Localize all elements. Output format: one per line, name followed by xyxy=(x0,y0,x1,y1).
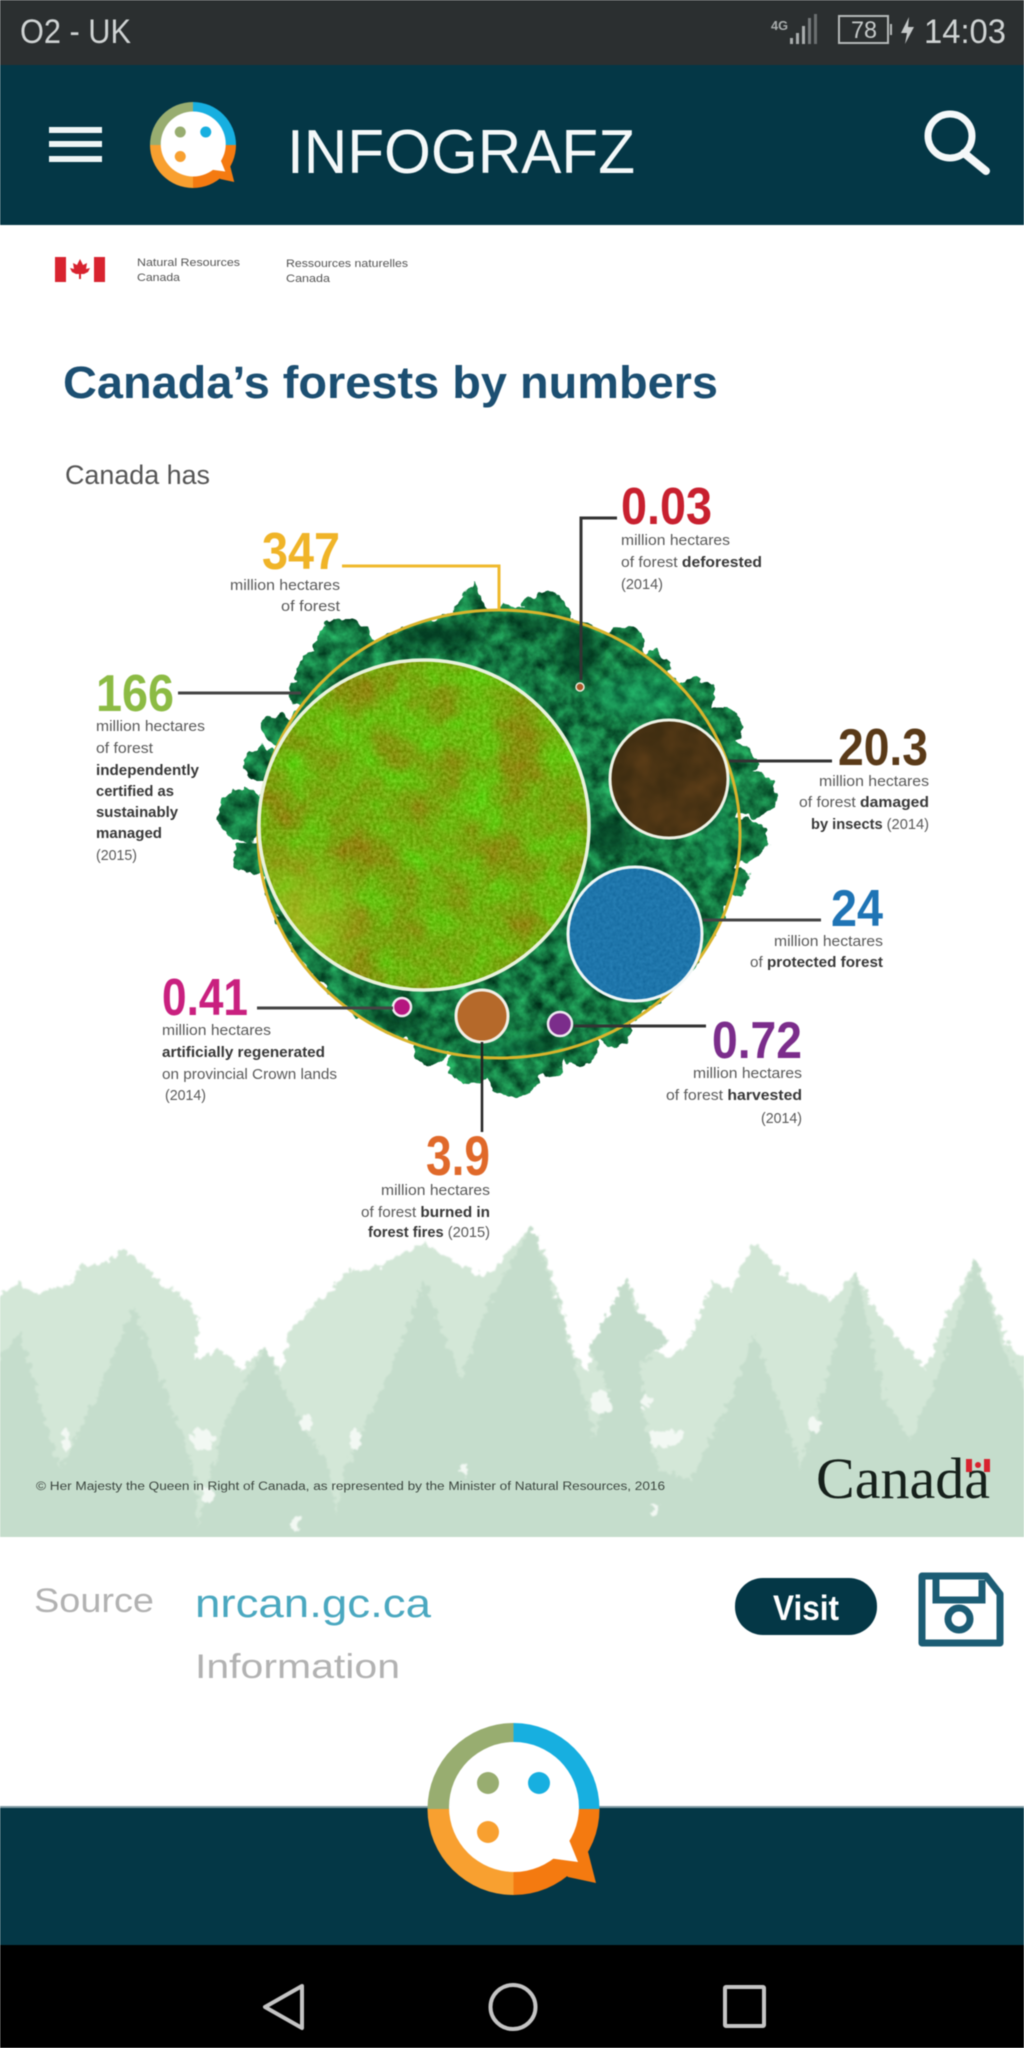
callout: 0.72 harvested: (2014) xyxy=(761,1110,802,1127)
callout: 0.03 deforested xyxy=(581,478,762,680)
callout: 166 certified: 166 xyxy=(96,665,174,723)
callout: 166 certified: million hectares xyxy=(96,718,205,735)
callout: 0.72 harvested: million hectares xyxy=(693,1065,802,1082)
callout: 3.9 burned: million hectares xyxy=(381,1182,490,1199)
android navigation bar xyxy=(0,1945,1024,2048)
app navigation bar xyxy=(0,65,1024,225)
callout: 166 certified xyxy=(96,665,301,864)
callout: 347 forest xyxy=(230,523,499,615)
app footer bar xyxy=(0,1806,1024,1945)
circle: regenerated 0.41 xyxy=(393,998,411,1016)
circle: harvested 0.72 xyxy=(548,1012,572,1036)
icon: infografz logo xyxy=(150,102,236,188)
icon: back xyxy=(265,1986,302,2028)
callout: 166 certified: of forest xyxy=(96,740,154,757)
callout: 3.9 burned xyxy=(361,1042,490,1241)
callout: 20.3 insects: of forest damaged xyxy=(799,794,929,811)
callout: 0.41 regenerated: on provincial Crown lands xyxy=(162,1066,337,1083)
icon: canadian flag xyxy=(55,257,105,282)
callout: 3.9 burned: 3.9 xyxy=(426,1124,490,1187)
light trees xyxy=(0,1225,1024,1560)
callout: 0.41 regenerated: artificially regenerated xyxy=(162,1044,325,1061)
phone status bar xyxy=(0,0,1024,65)
callout: 24 protected: million hectares xyxy=(774,933,883,950)
callout: 0.72 harvested: of forest harvested xyxy=(666,1087,802,1104)
callout: 20.3 insects: million hectares xyxy=(819,773,929,790)
callout: 166 certified: independently xyxy=(96,762,200,779)
canada wordmark: Canada xyxy=(816,1446,990,1511)
government of canada signature xyxy=(55,257,409,285)
english department name xyxy=(137,257,241,284)
visit button: Visit xyxy=(773,1589,839,1628)
icon: large infografz logo xyxy=(428,1723,600,1895)
callout: 166 certified: sustainably xyxy=(96,804,179,821)
french department name: Ressources naturelles xyxy=(286,258,409,270)
copyright line: © Her Majesty the Queen in Right of Canada, as represented by the Minister of Natural Resources, 2016 xyxy=(36,1481,665,1493)
callout: 0.03 deforested: 0.03 xyxy=(621,478,712,536)
callout: 166 certified: (2015) xyxy=(96,847,137,864)
signal indicator: 4G xyxy=(771,18,788,33)
callout: 166 certified: certified as xyxy=(96,783,174,800)
battery level: 78 xyxy=(851,17,877,44)
circle: protected forest 24 xyxy=(568,867,702,1001)
icon: search xyxy=(928,114,986,171)
total forest ring: 347 xyxy=(258,610,740,1058)
english department name: Natural Resources xyxy=(137,257,241,269)
callout: 0.41 regenerated: million hectares xyxy=(162,1022,271,1039)
callout: 20.3 insects: 20.3 xyxy=(838,719,928,777)
icon: menu xyxy=(49,127,102,162)
callout: 0.41 regenerated xyxy=(162,969,393,1104)
source label: Source xyxy=(34,1582,154,1620)
information label: Information xyxy=(195,1648,400,1686)
callout: 347 forest: million hectares xyxy=(230,577,340,594)
callout: 3.9 burned: forest fires (2015) xyxy=(368,1224,490,1241)
callout: 20.3 insects xyxy=(729,719,929,833)
battery level xyxy=(839,16,914,44)
canopy shadows xyxy=(370,617,632,1053)
clock: 14:03 xyxy=(924,13,1006,51)
visit button xyxy=(735,1578,877,1635)
canopy of trees xyxy=(218,582,777,1098)
icon: small flag xyxy=(966,1459,990,1472)
circle: burned 3.9 xyxy=(456,990,508,1042)
callout: 24 protected: 24 xyxy=(831,880,883,938)
callout: 20.3 insects: by insects (2014) xyxy=(811,816,929,833)
signal indicator xyxy=(771,14,817,44)
gaps in the trees xyxy=(62,1390,821,1532)
french department name xyxy=(286,258,409,285)
brand name: INFOGRAFZ xyxy=(287,118,635,187)
callout: 0.03 deforested: (2014) xyxy=(621,576,663,593)
callout: 347 forest: of forest xyxy=(281,598,341,615)
title: Canada’s forests by numbers xyxy=(63,357,718,408)
treeline background xyxy=(0,1225,1024,1560)
callout: 0.41 regenerated: 0.41 xyxy=(162,969,248,1027)
callout: 24 protected: of protected forest xyxy=(750,954,883,971)
callout: 0.72 harvested xyxy=(574,1012,802,1127)
callout: 24 protected xyxy=(703,880,883,971)
icon: home xyxy=(490,1985,536,2029)
callout: 0.03 deforested: million hectares xyxy=(621,532,730,549)
source panel xyxy=(0,1537,1024,1807)
source link: nrcan.gc.ca xyxy=(195,1582,432,1626)
callout: 0.03 deforested: of forest deforested xyxy=(621,554,762,571)
callout: 3.9 burned: of forest burned in xyxy=(361,1204,490,1221)
circle: insect damage 20.3 xyxy=(610,720,728,838)
callout: 0.72 harvested: 0.72 xyxy=(712,1012,802,1070)
english department name: Canada xyxy=(137,272,181,284)
canopy highlights xyxy=(460,673,725,1058)
intro text: Canada has xyxy=(65,460,210,490)
callout: 0.41 regenerated: (2014) xyxy=(165,1087,206,1104)
callout: 347 forest: 347 xyxy=(262,523,340,581)
french department name: Canada xyxy=(286,273,331,285)
circle: deforested 0.03 xyxy=(576,683,584,691)
icon: save xyxy=(922,1576,1000,1643)
forest circle chart xyxy=(215,582,777,1098)
circle: certified forest 166 xyxy=(256,657,592,992)
callout: 166 certified: managed xyxy=(96,825,162,842)
icon: recents xyxy=(725,1987,764,2026)
carrier label: O2 - UK xyxy=(20,13,131,51)
darker trees xyxy=(0,1225,1024,1560)
